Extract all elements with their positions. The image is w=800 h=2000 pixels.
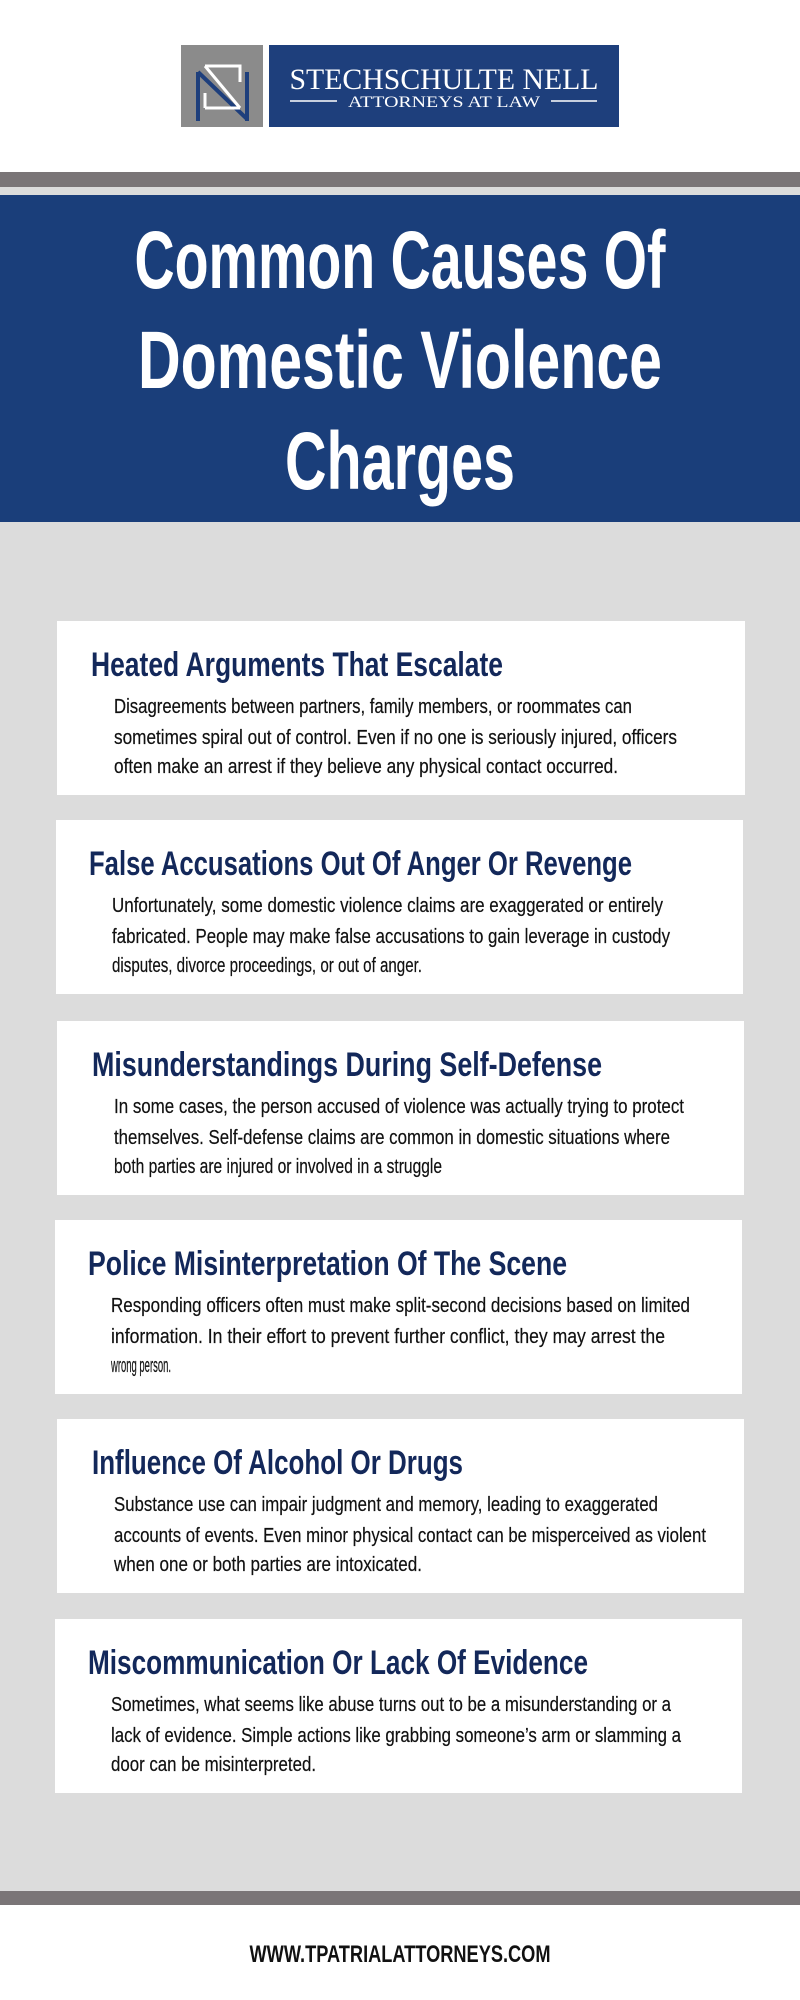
card 5: Influence Of Alcohol Or Drugs xyxy=(92,1444,463,1482)
card 3: themselves. Self-defense claims are common in domestic situations where xyxy=(114,1127,670,1149)
card 6: door can be misinterpreted. xyxy=(111,1754,316,1776)
card 5: when one or both parties are intoxicated. xyxy=(113,1554,422,1576)
title: Charges xyxy=(285,416,515,507)
card 1: often make an arrest if they believe any physical contact occurred. xyxy=(114,756,618,778)
card 1 xyxy=(57,621,745,795)
card 1: Heated Arguments That Escalate xyxy=(91,646,503,684)
logo: ATTORNEYS AT LAW xyxy=(348,94,541,111)
title xyxy=(134,215,666,507)
card 4: Responding officers often must make split-second decisions based on limited xyxy=(111,1295,690,1317)
footer url: WWW.TPATRIALATTORNEYS.COM xyxy=(250,1941,550,1968)
card 4: wrong person. xyxy=(111,1355,171,1377)
card 4: information. In their effort to prevent further conflict, they may arrest the xyxy=(111,1326,665,1348)
card 2 xyxy=(56,820,743,994)
card 6: Sometimes, what seems like abuse turns out to be a misunderstanding or a xyxy=(111,1694,672,1716)
card 5: accounts of events. Even minor physical contact can be misperceived as violent xyxy=(114,1525,706,1547)
card 2: Unfortunately, some domestic violence claims are exaggerated or entirely xyxy=(112,895,663,917)
card 5 xyxy=(57,1419,744,1593)
card 4 xyxy=(55,1220,742,1394)
card 3: In some cases, the person accused of violence was actually trying to protect xyxy=(114,1096,684,1118)
logo xyxy=(181,45,619,127)
card 2: False Accusations Out Of Anger Or Revenge xyxy=(89,845,632,883)
card 4: Police Misinterpretation Of The Scene xyxy=(88,1245,567,1283)
card 1: sometimes spiral out of control. Even if no one is seriously injured, officers xyxy=(114,727,677,749)
card 6 xyxy=(55,1619,742,1793)
card 1: Disagreements between partners, family members, or roommates can xyxy=(114,696,632,718)
header banner xyxy=(0,195,800,522)
card 3: Misunderstandings During Self-Defense xyxy=(92,1046,602,1084)
card 6: lack of evidence. Simple actions like grabbing someone’s arm or slamming a xyxy=(111,1725,682,1747)
card 2: disputes, divorce proceedings, or out of anger. xyxy=(112,955,422,977)
logo: STECHSCHULTE NELL xyxy=(290,63,598,96)
card 3 xyxy=(57,1021,744,1195)
card 3: both parties are injured or involved in a struggle xyxy=(114,1156,442,1178)
card 5: Substance use can impair judgment and memory, leading to exaggerated xyxy=(114,1494,658,1516)
card 6: Miscommunication Or Lack Of Evidence xyxy=(88,1644,588,1682)
card 2: fabricated. People may make false accusations to gain leverage in custody xyxy=(112,926,670,948)
